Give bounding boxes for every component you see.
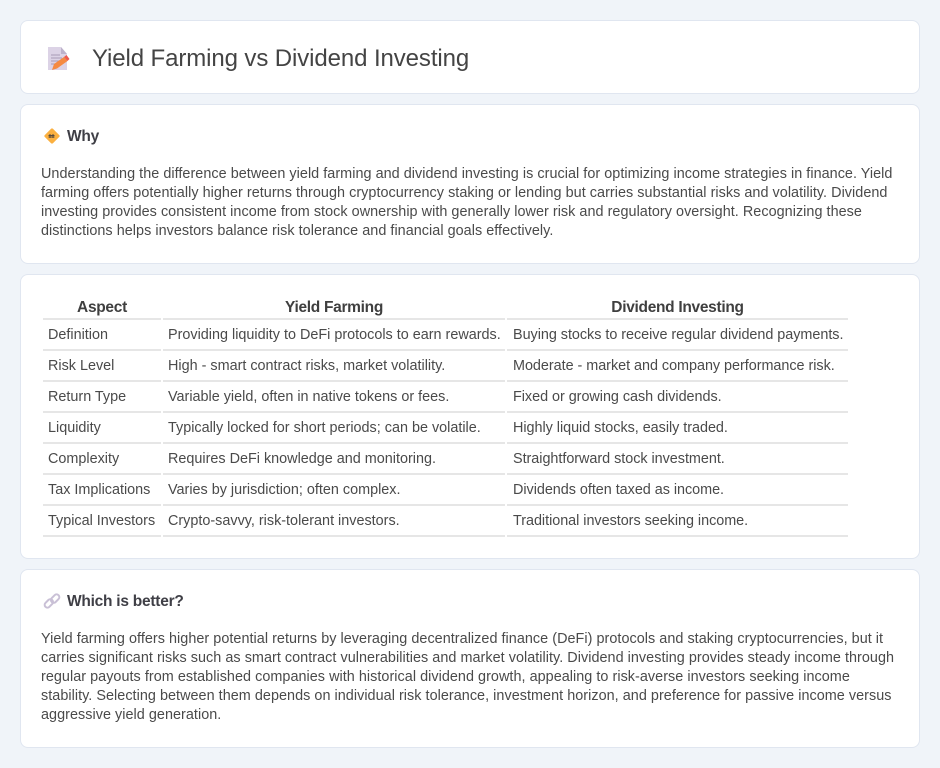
text: Buying stocks to receive regular dividend payments. [513, 327, 843, 343]
text: Typical Investors [48, 513, 155, 529]
table: yield farming vs dividend investing [43, 299, 848, 537]
text: Dividend Investing [611, 299, 744, 316]
text: farming offers potentially higher returns through cryptocurrency staking or lending but carries substantial risks and volatility. Dividend [41, 185, 887, 201]
text: stability. Selecting between them depends on individual risk tolerance, investment horizon, and preference for passive income versus [41, 688, 892, 704]
panel: why [20, 104, 920, 264]
text: Varies by jurisdiction; often complex. [168, 482, 400, 498]
icon: document with pencil [48, 47, 70, 70]
text: distinctions helps investors balance risk tolerance and financial goals effectively. [41, 223, 553, 239]
text: Complexity [48, 451, 119, 467]
panel: comparison table [20, 274, 920, 559]
icon: chain link [44, 593, 60, 609]
text: Return Type [48, 389, 126, 405]
text: regular payouts from established companies with historical dividend growth, appealing to risk-averse investors seeking income [41, 669, 850, 685]
text block: why [41, 166, 892, 239]
text: Variable yield, often in native tokens or fees. [168, 389, 449, 405]
text: carries significant risks such as smart contract vulnerabilities and market volatility. Dividend investing provides steady income through [41, 650, 894, 666]
text: Tax Implications [48, 482, 150, 498]
text: Understanding the difference between yield farming and dividend investing is crucial for optimizing income strategies in finance. Yield [41, 166, 892, 182]
icon: warning diamond [44, 128, 60, 144]
panel: header [20, 20, 920, 94]
text: Definition [48, 327, 108, 343]
text: aggressive yield generation. [41, 707, 221, 723]
text: Typically locked for short periods; can be volatile. [168, 420, 481, 436]
text: Dividends often taxed as income. [513, 482, 724, 498]
text: Traditional investors seeking income. [513, 513, 748, 529]
title: Yield Farming vs Dividend Investing [92, 45, 469, 72]
text: Providing liquidity to DeFi protocols to earn rewards. [168, 327, 501, 343]
text: Moderate - market and company performance risk. [513, 358, 835, 374]
panel: which is better [20, 569, 920, 748]
text: Requires DeFi knowledge and monitoring. [168, 451, 436, 467]
text: Highly liquid stocks, easily traded. [513, 420, 728, 436]
text: Liquidity [48, 420, 101, 436]
text: Straightforward stock investment. [513, 451, 725, 467]
text: Risk Level [48, 358, 114, 374]
text: Yield farming offers higher potential returns by leveraging decentralized finance (DeFi) protocols and staking cryptocurrencies, but it [41, 631, 883, 647]
text: investing provides consistent income from stock ownership with generally lower risk and regulatory oversight. Recognizing these [41, 204, 862, 220]
text block: which is better [41, 631, 894, 723]
text: Aspect [77, 299, 127, 316]
heading: why: Why [67, 128, 99, 145]
text: Yield Farming [285, 299, 383, 316]
text: Crypto-savvy, risk-tolerant investors. [168, 513, 400, 529]
text: Fixed or growing cash dividends. [513, 389, 722, 405]
heading: which is better: Which is better? [67, 593, 184, 610]
text: High - smart contract risks, market volatility. [168, 358, 445, 374]
